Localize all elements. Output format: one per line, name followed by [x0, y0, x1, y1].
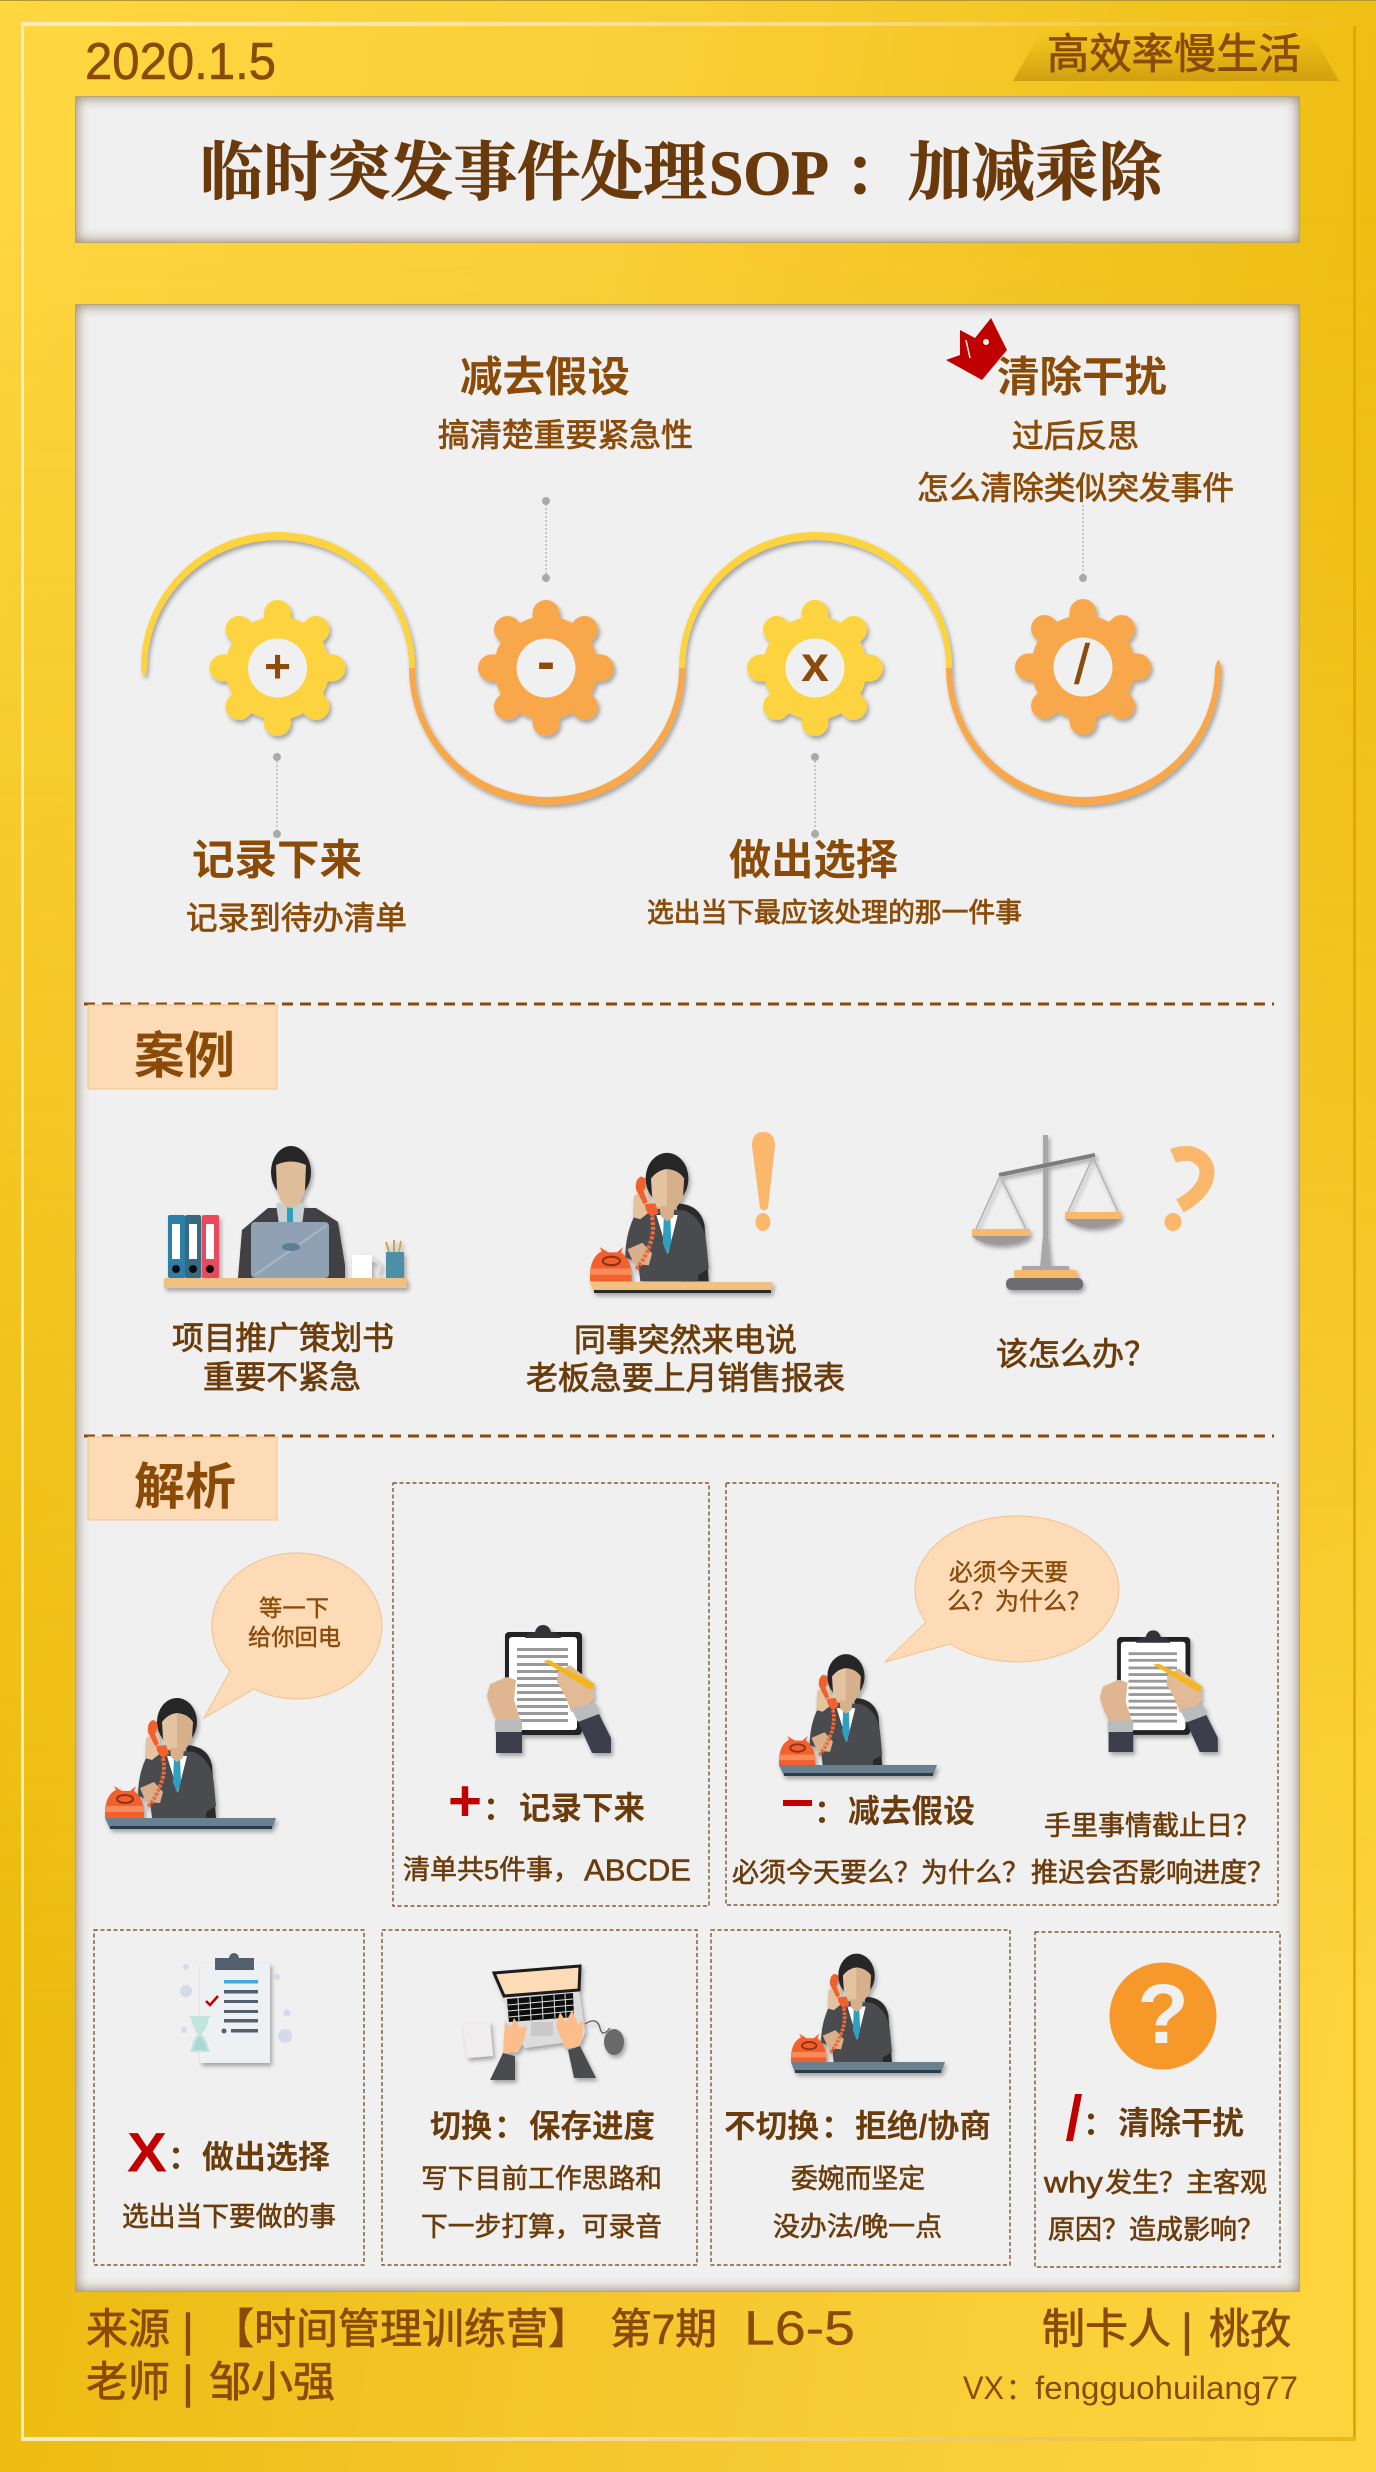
multiply heading: ：: [160, 2134, 192, 2180]
case text 1: 重要不紧急: [203, 1359, 361, 1395]
footer: source: 邹小强: [209, 2358, 335, 2406]
case text 1: 项目推广策划书: [172, 1320, 394, 1356]
step: choose: 选出当下最应该处理的那一件事: [647, 898, 1022, 928]
title: 加减乘除: [908, 138, 1166, 208]
leader line: multiply: [811, 753, 819, 838]
title: [200, 132, 1166, 214]
gear: divide: /: [1074, 632, 1090, 696]
divide text: [1043, 2166, 1267, 2245]
plus text: [403, 1852, 691, 1888]
step: subtract assumptions: [438, 354, 693, 453]
section tag: analysis: 解析: [134, 1459, 236, 1515]
gear: minus: [492, 614, 600, 722]
speech bubble: must do today: 必须今天要: [949, 1560, 1068, 1586]
icon: checklist with hourglass: [180, 1953, 292, 2063]
step: record: 记录下来: [192, 836, 362, 884]
footer: source: [86, 2302, 855, 2408]
no-switch heading: [724, 2103, 991, 2149]
gear: divide: [1028, 612, 1138, 722]
switch text: 写下目前工作思路和: [421, 2164, 662, 2194]
illustration: man on phone: [779, 1654, 937, 1776]
minus text: 手里事情截止日？: [1044, 1811, 1260, 1841]
plus text: 清单共5件事，: [403, 1855, 580, 1885]
section tag: analysis: [88, 1437, 277, 1520]
footer: maker: |: [1181, 2304, 1193, 2356]
illustration: colleague on the phone with exclamation: [590, 1132, 775, 1293]
divide heading: 清除干扰: [1118, 2105, 1244, 2141]
title: SOP: [709, 138, 829, 208]
switch heading: 切换: [430, 2108, 492, 2144]
title panel: [75, 96, 1300, 243]
gear: multiply: x: [801, 636, 829, 692]
no-switch heading: ：: [813, 2103, 845, 2149]
date: 2020.1.5: [85, 33, 276, 91]
footer: maker: fengguohuilang77: [1035, 2370, 1298, 2406]
speech bubble: call back: 等一下: [259, 1595, 329, 1621]
icon: clipboard: [1100, 1630, 1218, 1752]
step: subtract assumptions: 搞清楚重要紧急性: [438, 417, 693, 453]
divide text: 发生？主客观: [1105, 2168, 1267, 2198]
no-switch text: [773, 2164, 942, 2242]
case text 3: 该怎么办？: [996, 1336, 1156, 1372]
minus text: [732, 1811, 1274, 1888]
illustration: man on phone: [105, 1698, 276, 1829]
icon: question circle: [1110, 1962, 1216, 2070]
gear: minus: -: [537, 632, 555, 692]
plus heading: ：: [475, 1785, 507, 1831]
leader line: minus: [542, 497, 550, 582]
minus heading: 减去假设: [848, 1793, 975, 1829]
multiply heading: 做出选择: [202, 2139, 330, 2175]
panel: plus record: [393, 1483, 709, 1906]
footer: source: 老师: [86, 2358, 170, 2406]
illustration: man at desk with folders: [164, 1146, 407, 1288]
footer: source: 第7期: [610, 2306, 717, 2352]
section tag: case: 案例: [134, 1028, 235, 1084]
footer: maker: VX: [963, 2370, 1004, 2406]
footer: source: L6-5: [744, 2302, 855, 2356]
icon: laptop and hands: [463, 1966, 624, 2080]
no-switch heading: 拒绝/协商: [855, 2108, 991, 2144]
icon: red crown: [946, 318, 1009, 382]
leader line: plus: [273, 753, 281, 838]
switch text: [421, 2164, 662, 2242]
switch heading: 保存进度: [529, 2108, 655, 2144]
footer: source: 来源: [86, 2306, 170, 2352]
leader line: divide: [1079, 505, 1087, 582]
switch heading: [430, 2103, 655, 2149]
switch text: 下一步打算，可录音: [421, 2212, 662, 2242]
panel: no switch, refuse or negotiate: [711, 1930, 1010, 2265]
s-curve path: [141, 532, 1221, 805]
speech bubble: must do today: 么？为什么？: [947, 1588, 1091, 1616]
footer: maker: 桃孜: [1209, 2306, 1291, 2352]
icon: question circle: ?: [1137, 1967, 1189, 2061]
plus heading: 记录下来: [519, 1790, 645, 1826]
plus heading: [448, 1768, 645, 1834]
plus heading: +: [448, 1768, 482, 1834]
no-switch heading: 不切换: [724, 2108, 819, 2144]
no-switch text: 没办法/晚一点: [773, 2212, 942, 2242]
footer: source: |: [182, 2304, 194, 2356]
step: choose: 做出选择: [729, 836, 898, 884]
brand ribbon: 高效率慢生活: [1047, 30, 1301, 78]
minus heading: ：: [806, 1788, 838, 1834]
footer: maker: 制卡人: [1042, 2306, 1171, 2352]
step: record: 记录到待办清单: [186, 900, 407, 936]
multiply heading: X: [127, 2120, 167, 2184]
title: ：: [832, 132, 888, 214]
step: record: [186, 836, 407, 936]
footer: source: |: [182, 2356, 194, 2408]
case text 2: 老板急要上月销售报表: [526, 1360, 845, 1396]
panel: multiply choose: [94, 1930, 364, 2265]
main content panel: [75, 304, 1300, 2292]
speech bubble: call back: [204, 1553, 382, 1718]
panel: minus assumptions: [726, 1483, 1278, 1905]
step: clear interference: [917, 354, 1234, 506]
step: choose: [647, 836, 1022, 928]
illustration: scales with question mark: [972, 1135, 1207, 1290]
panel: switch, save progress: [382, 1930, 697, 2265]
step: clear interference: 清除干扰: [997, 354, 1167, 400]
step: clear interference: 过后反思: [1012, 418, 1139, 454]
illustration: man on phone: [791, 1954, 945, 2073]
minus heading: [783, 1788, 975, 1834]
minus text: 推迟会否影响进度？: [1031, 1858, 1274, 1888]
switch heading: ：: [486, 2103, 518, 2149]
gear: multiply: [760, 614, 870, 722]
section tag: case: [88, 1005, 277, 1089]
divide heading: ：: [1075, 2100, 1107, 2146]
minus text: 必须今天要么？为什么？: [732, 1858, 1029, 1888]
case text 1: [172, 1320, 394, 1395]
step: subtract assumptions: 减去假设: [460, 354, 630, 400]
no-switch text: 委婉而坚定: [791, 2164, 925, 2194]
step: clear interference: 怎么清除类似突发事件: [917, 470, 1234, 506]
icon: clipboard: [487, 1625, 611, 1753]
plus text: ABCDE: [584, 1852, 691, 1888]
divide heading: [1066, 2094, 1244, 2146]
panel: divide clear interference: [1035, 1932, 1280, 2267]
divide text: 原因？造成影响？: [1048, 2215, 1264, 2245]
speech bubble: must do today: [885, 1516, 1119, 1662]
gear: plus: +: [264, 640, 291, 692]
divide text: why: [1043, 2166, 1103, 2200]
multiply heading: [127, 2120, 330, 2184]
footer: maker: ：: [998, 2366, 1028, 2410]
multiply text: 选出当下要做的事: [122, 2202, 336, 2232]
speech bubble: call back: 给你回电: [248, 1624, 341, 1650]
footer: source: 【时间管理训练营】: [212, 2306, 590, 2352]
footer: maker: [963, 2304, 1298, 2410]
title: 临时突发事件处理: [200, 138, 707, 208]
case text 2: [526, 1322, 845, 1396]
gear: plus: [223, 614, 332, 722]
case text 2: 同事突然来电说: [574, 1322, 797, 1358]
